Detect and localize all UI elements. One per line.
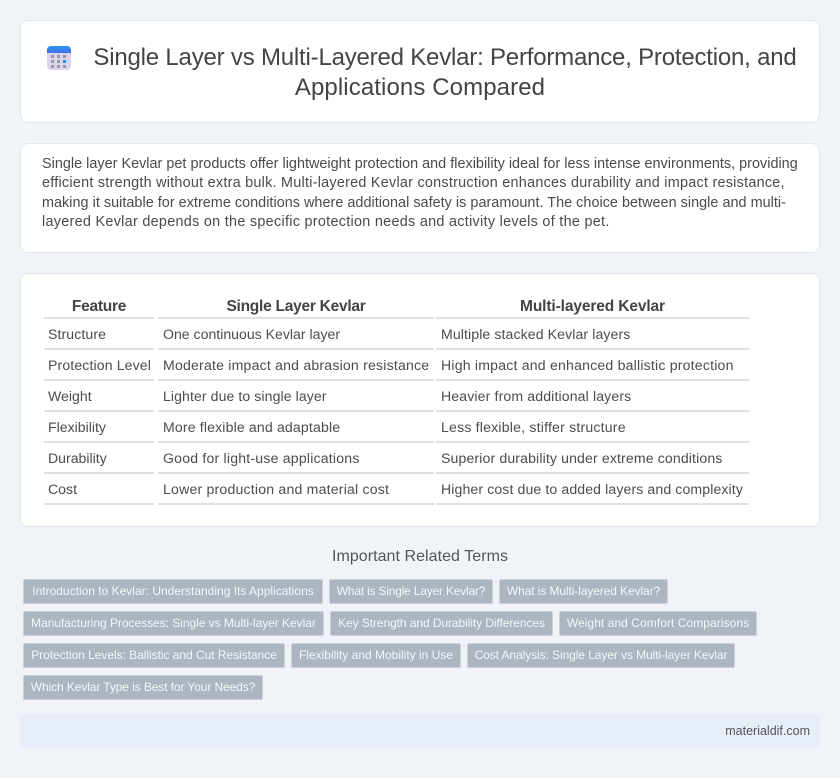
panel: summary: [20, 143, 820, 253]
table header row: Single Layer Kevlar: [226, 298, 366, 315]
related terms tags: Weight and Comfort Comparisons: [567, 616, 749, 630]
related terms tags: What is Single Layer Kevlar?: [337, 584, 485, 598]
summary text: efficient strength without extra bulk. Multi-layered Kevlar construction enhances durability and impact resistance,: [42, 175, 785, 191]
related terms tags: Cost Analysis: Single Layer vs Multi-layer Kevlar: [475, 648, 727, 662]
row: structure: One continuous Kevlar layer: [163, 326, 340, 342]
row: protection level: Moderate impact and abrasion resistance: [163, 357, 429, 373]
summary text: layered Kevlar depends on the specific protection needs and activity levels of the pet.: [42, 214, 610, 230]
related terms tags: What is Multi-layered Kevlar?: [507, 584, 660, 598]
row: durability: Good for light-use applications: [163, 450, 360, 466]
related terms tags: Introduction to Kevlar: Understanding Its Applications: [32, 584, 314, 598]
row: cost: [48, 481, 743, 497]
summary text: [42, 156, 798, 230]
table header row: Multi-layered Kevlar: [520, 298, 665, 315]
title: Applications Compared: [295, 74, 545, 101]
row: structure: [48, 326, 630, 342]
table header row: [72, 298, 665, 315]
row: structure: Structure: [48, 326, 106, 342]
related terms tags: Key Strength and Durability Differences: [338, 616, 545, 630]
row: durability: Durability: [48, 450, 107, 466]
row: flexibility: More flexible and adaptable: [163, 419, 340, 435]
footer source: materialdif.com: [725, 724, 810, 738]
row: durability: [48, 450, 722, 466]
row: cost: Lower production and material cost: [163, 481, 389, 497]
row: flexibility: [48, 419, 626, 435]
summary text: Single layer Kevlar pet products offer lightweight protection and flexibility ideal for less intense environments, providing: [42, 156, 798, 172]
comparison table: [44, 317, 749, 505]
panel: comparison table: [20, 273, 820, 527]
related terms tags: Protection Levels: Ballistic and Cut Resistance: [31, 648, 277, 662]
panel: header: [20, 20, 820, 123]
table header row: Feature: [72, 298, 126, 315]
row: weight: Lighter due to single layer: [163, 388, 327, 404]
heading: related terms: Important Related Terms: [332, 548, 508, 565]
row: protection level: [48, 357, 734, 373]
title: [93, 44, 797, 101]
related terms tags: Flexibility and Mobility in Use: [299, 648, 453, 662]
row: durability: Superior durability under extreme conditions: [441, 450, 722, 466]
related terms tags: Which Kevlar Type is Best for Your Needs?: [31, 680, 255, 694]
row: weight: Heavier from additional layers: [441, 388, 631, 404]
icon: calendar: [47, 46, 71, 70]
footer: [20, 714, 820, 748]
row: weight: [48, 388, 631, 404]
row: flexibility: Less flexible, stiffer structure: [441, 419, 626, 435]
related terms tags: [23, 579, 757, 700]
row: protection level: High impact and enhanced ballistic protection: [441, 357, 734, 373]
row: structure: Multiple stacked Kevlar layers: [441, 326, 630, 342]
row: cost: Cost: [48, 481, 77, 497]
row: weight: Weight: [48, 388, 92, 404]
row: protection level: Protection Level: [48, 357, 151, 373]
title: Single Layer vs Multi-Layered Kevlar: Performance, Protection, and: [93, 44, 797, 71]
row: cost: Higher cost due to added layers and complexity: [441, 481, 743, 497]
related terms tags: Manufacturing Processes: Single vs Multi-layer Kevlar: [31, 616, 316, 630]
summary text: making it suitable for extreme conditions where additional safety is paramount. The choice between single and multi-: [42, 195, 786, 211]
row: flexibility: Flexibility: [48, 419, 106, 435]
